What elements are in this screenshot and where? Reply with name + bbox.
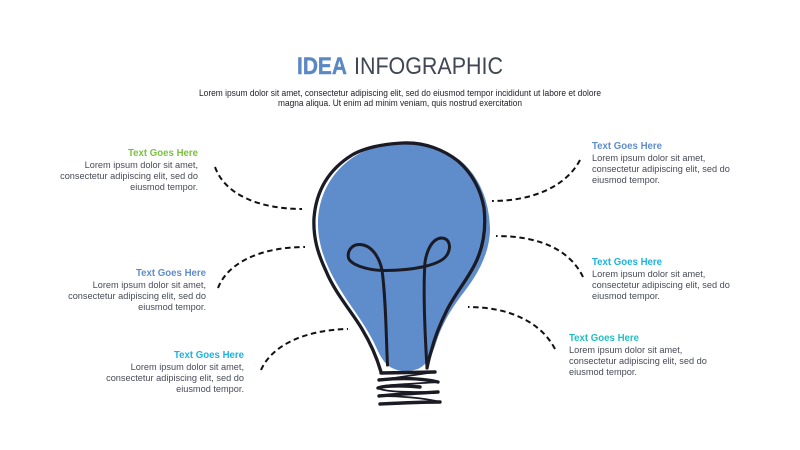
connector: middle right [496,236,583,277]
text block: top left: Text Goes Here [128,148,198,159]
text block: middle right: eiusmod tempor. [592,291,660,301]
title: IDEA [297,53,347,80]
text block: middle left: consectetur adipiscing elit, sed do [68,291,206,301]
bulb fill [318,143,490,371]
connector: bottom left [261,329,348,370]
text block: top right: Lorem ipsum dolor sit amet, [592,153,705,163]
text block: middle right: consectetur adipiscing elit, sed do [592,280,730,290]
subtitle: magna aliqua. Ut enim ad minim veniam, quis nostrud exercitation [278,98,522,108]
subtitle [199,88,601,108]
screw base [378,372,440,404]
bulb outline [314,143,485,372]
text block: bottom right [569,333,707,377]
text block: bottom left: Text Goes Here [174,350,244,361]
text block: middle right [592,257,730,301]
text block: bottom left: consectetur adipiscing elit, sed do [106,373,244,383]
title: INFOGRAPHIC [354,53,503,80]
text block: top left: eiusmod tempor. [130,182,198,192]
filament [348,238,449,368]
thread diagonals [378,372,440,402]
connector: top right [492,160,580,201]
text block: middle right: Text Goes Here [592,257,662,268]
subtitle: Lorem ipsum dolor sit amet, consectetur adipiscing elit, sed do eiusmod tempor incididunt ut labore et dolore [199,88,601,98]
title [297,53,503,80]
text block: bottom left: Lorem ipsum dolor sit amet, [131,362,244,372]
connector: bottom right [468,307,555,349]
connector: top left [215,167,302,209]
text block: top right: consectetur adipiscing elit, sed do [592,164,730,174]
text block: top left [60,148,198,192]
text block: top left: Lorem ipsum dolor sit amet, [85,160,198,170]
text block: bottom right: Text Goes Here [569,333,639,344]
icon: light bulb [314,143,490,404]
text block: middle left: Text Goes Here [136,268,206,279]
text block: middle left [68,268,206,312]
text block: top right: eiusmod tempor. [592,175,660,185]
text block: middle left: Lorem ipsum dolor sit amet, [93,280,206,290]
text block: top right [592,141,730,185]
connector: middle left [218,247,305,288]
text block: bottom left [106,350,244,394]
text block: top right: Text Goes Here [592,141,662,152]
text block: top left: consectetur adipiscing elit, sed do [60,171,198,181]
text block: middle left: eiusmod tempor. [138,302,206,312]
text block: bottom right: consectetur adipiscing elit, sed do [569,356,707,366]
text block: bottom right: Lorem ipsum dolor sit amet, [569,345,682,355]
text block: bottom right: eiusmod tempor. [569,367,637,377]
thread bars [378,372,440,404]
text block: middle right: Lorem ipsum dolor sit amet, [592,269,705,279]
text block: bottom left: eiusmod tempor. [176,384,244,394]
